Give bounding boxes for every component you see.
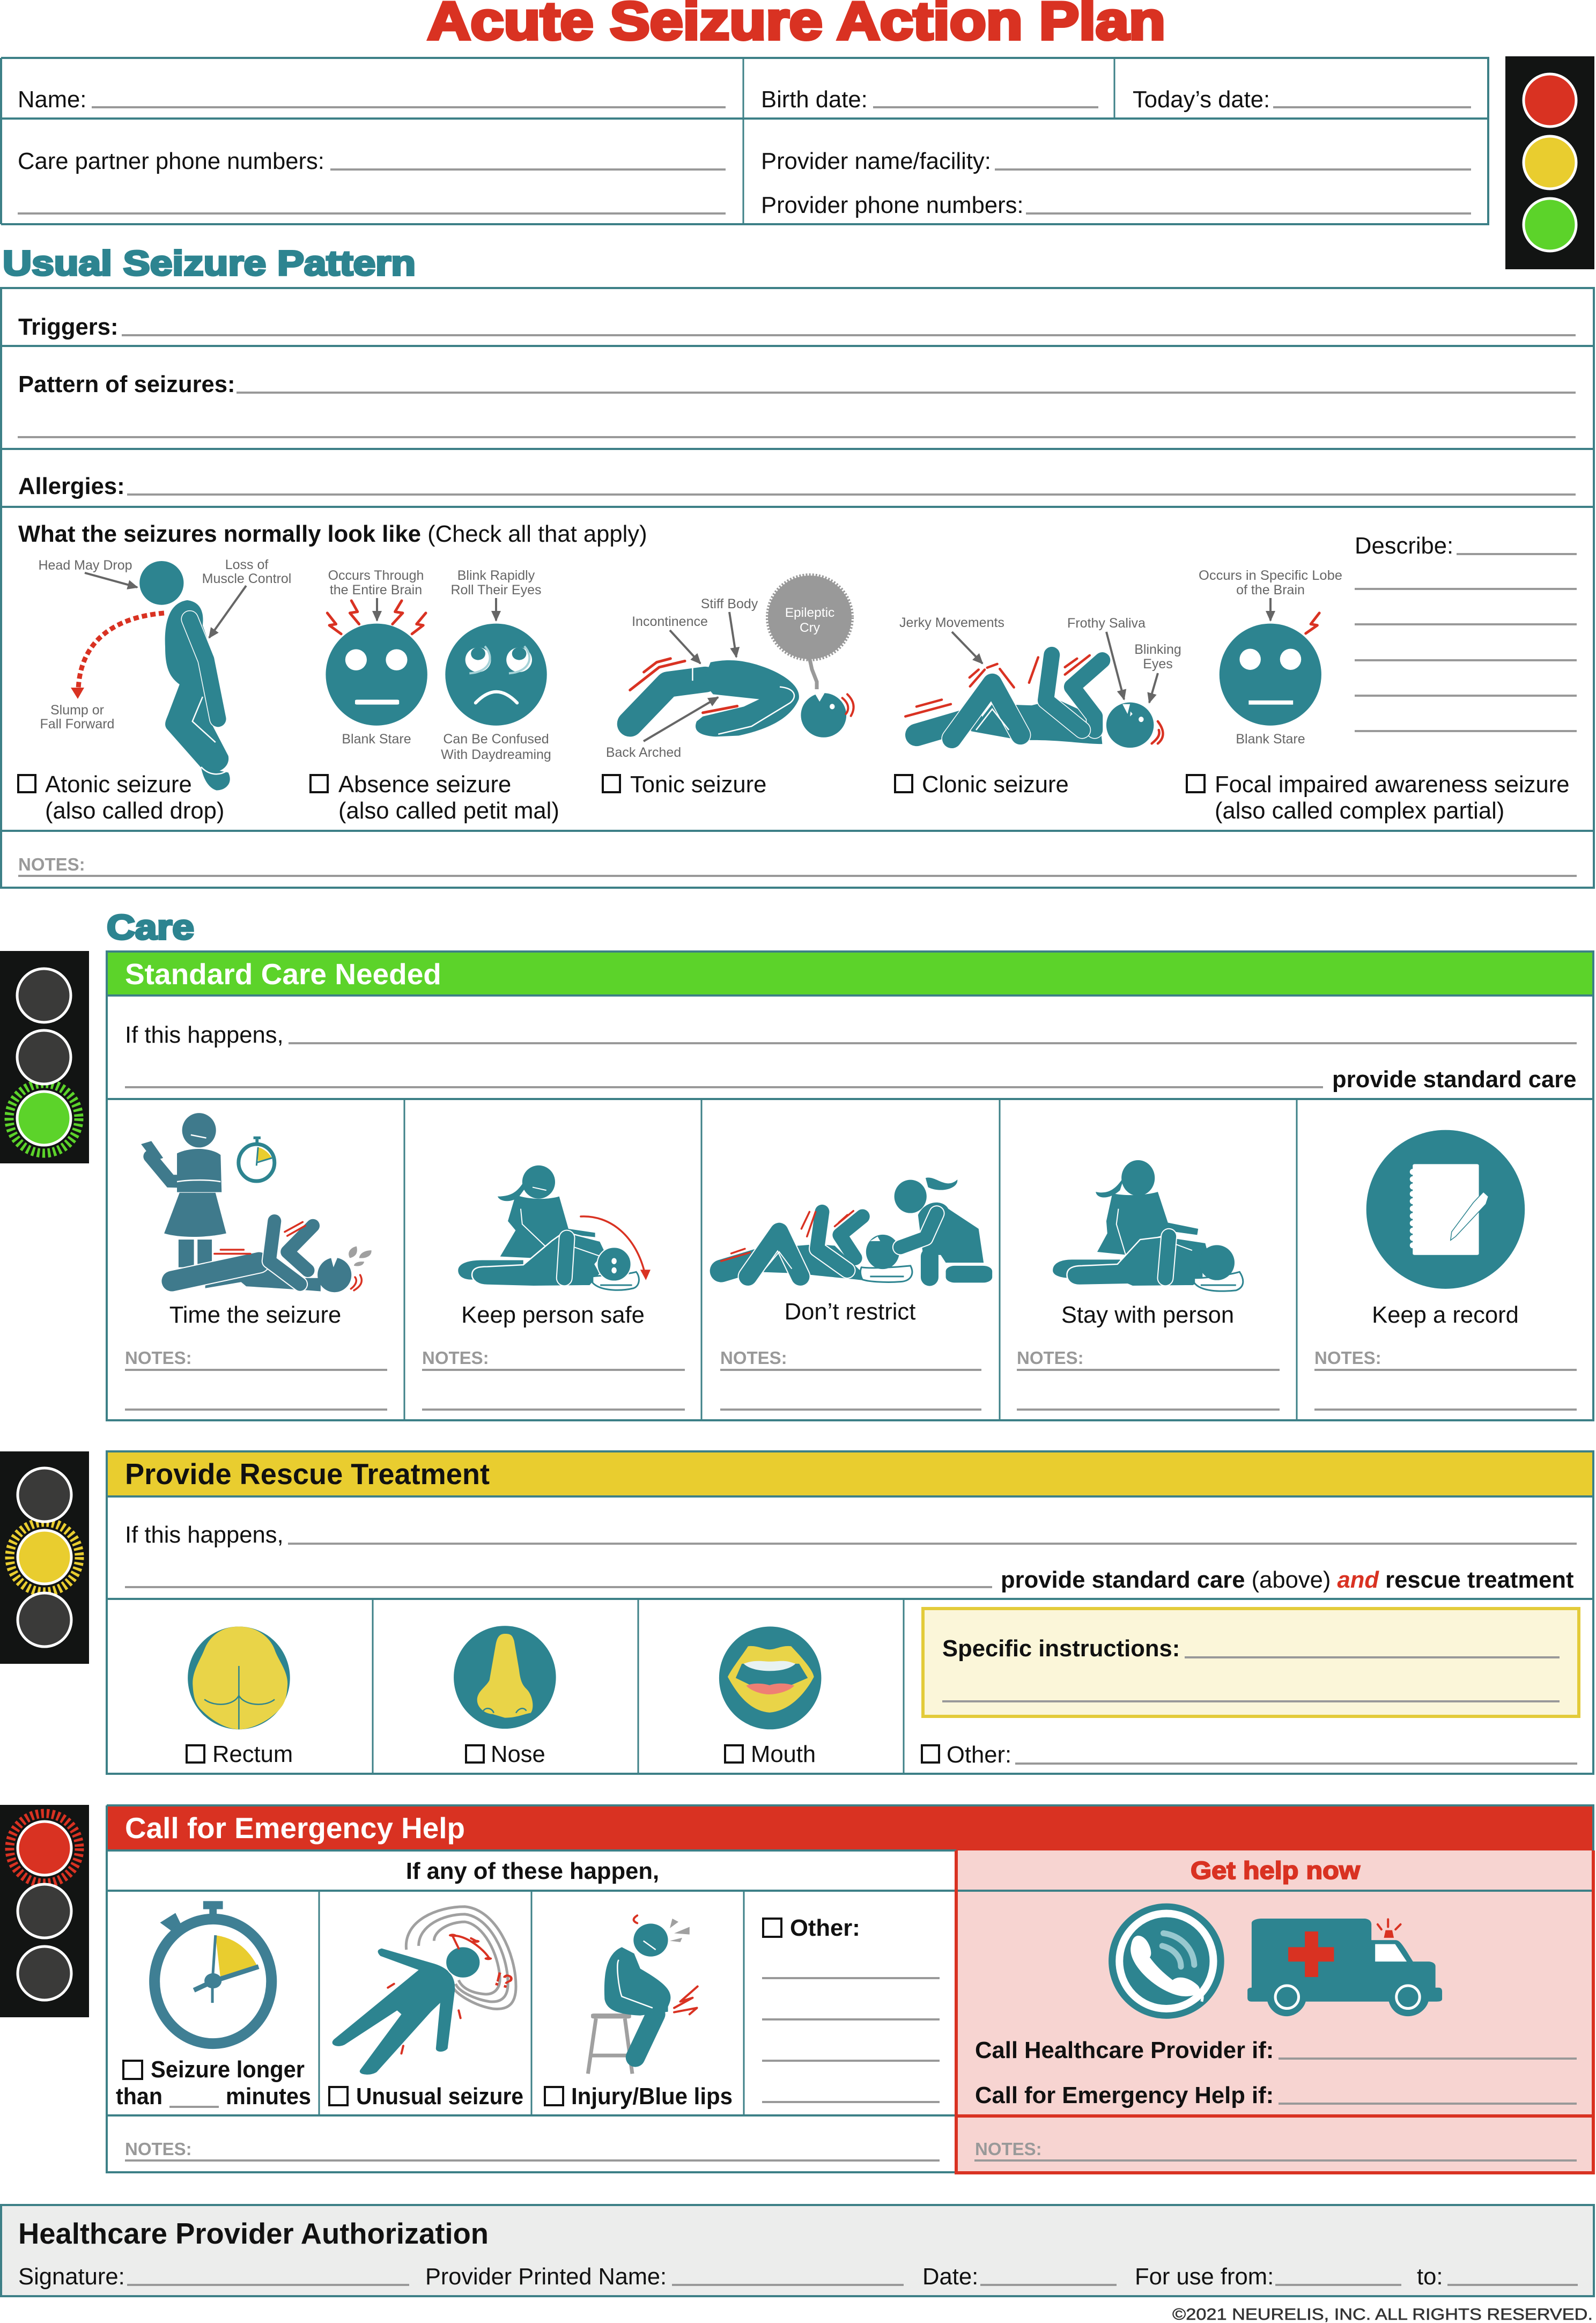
heading: Call for Emergency Help	[125, 1811, 465, 1845]
text: today's date: Today’s date:	[1133, 87, 1270, 113]
checkbox and label: seizure longer: minutes	[226, 2084, 311, 2110]
text: if this happens: If this happens,	[125, 1022, 284, 1048]
panel: provide rescue treatment	[107, 1451, 1593, 1774]
notes: NOTES:	[975, 2139, 1042, 2159]
label: Incontinence	[632, 614, 708, 629]
text: care partner: Care partner phone numbers:	[18, 149, 324, 174]
label: Can Be Confused	[443, 732, 549, 747]
icon: stopwatch	[154, 1901, 271, 2044]
text: call for emergency help: Call for Emergency Help if:	[975, 2083, 1274, 2108]
callout: epileptic cry	[768, 576, 852, 689]
heading: usual seizure pattern: Usual Seizure Pattern	[3, 244, 416, 283]
text: birth date: Birth date:	[761, 87, 868, 113]
text: atonic: (also called drop)	[45, 798, 224, 824]
describe block: Describe:	[1355, 533, 1453, 559]
notes	[1314, 1348, 1577, 1410]
header bar: green	[107, 952, 1593, 995]
label: Blinking	[1134, 642, 1181, 657]
signature fields: to:	[1417, 2264, 1443, 2290]
checkbox and label: unusual seizure: Unusual seizure	[356, 2084, 523, 2110]
text: Stay with person	[1061, 1302, 1234, 1328]
illustration: focal seizure	[1199, 568, 1342, 747]
label: Eyes	[1143, 657, 1173, 672]
label: Occurs Through	[328, 568, 424, 583]
text: provide care and rescue: provide standard care (above) and rescue treatment	[1001, 1567, 1573, 1593]
checkbox: tonic	[603, 775, 620, 792]
traffic light: all on	[1505, 56, 1594, 269]
text: provide standard care: provide standard care	[1332, 1067, 1576, 1093]
checkbox and label: injury: Injury/Blue lips	[571, 2084, 733, 2110]
checkbox: clonic	[895, 775, 912, 792]
checkbox and label: seizure longer: than	[116, 2084, 162, 2110]
red marks: !?	[492, 1967, 515, 1994]
callout: epileptic cry: Cry	[800, 621, 821, 635]
label: Stiff Body	[701, 596, 758, 611]
callout: specific instructions: Specific instructions:	[942, 1636, 1180, 1662]
label: Head May Drop	[38, 558, 132, 573]
illustration: stay with person	[1053, 1160, 1243, 1291]
text: provider phone: Provider phone numbers:	[761, 193, 1023, 218]
text: what seizures look like: What the seizures normally look like (Check all that apply)	[18, 521, 647, 547]
signature fields: Date:	[922, 2264, 978, 2290]
icon: injury on stool	[588, 1915, 698, 2074]
heading: care: Care	[107, 908, 194, 947]
checkbox and label: other	[922, 1742, 1577, 1768]
checkbox: focal	[1187, 775, 1205, 792]
icon: rectum	[188, 1627, 290, 1729]
label: Occurs in Specific Lobe	[1199, 568, 1342, 583]
notes: NOTES:	[125, 1348, 192, 1368]
text: name: Name:	[18, 87, 86, 113]
header bar: red	[107, 1805, 1593, 1850]
traffic light: yellow	[0, 1451, 89, 1664]
heading: Provide Rescue Treatment	[125, 1457, 490, 1491]
traffic light: red	[0, 1805, 89, 2017]
label: Blank Stare	[1236, 732, 1305, 747]
icon: unusual seizure	[332, 1907, 516, 2075]
text: Keep person safe	[461, 1302, 645, 1328]
checkbox and label: mouth: Mouth	[751, 1742, 816, 1767]
text: focal: Focal impaired awareness seizure	[1215, 772, 1569, 798]
panel: healthcare provider authorization	[1, 2205, 1594, 2296]
illustration: clonic seizure	[899, 615, 1181, 748]
illustration: time the seizure	[141, 1113, 372, 1292]
text: triggers: Triggers:	[18, 314, 119, 340]
describe block	[1355, 533, 1577, 731]
label: Muscle Control	[202, 571, 291, 586]
illustration: absence seizure	[326, 568, 551, 762]
illustration: atonic seizure	[38, 557, 291, 790]
copyright: ©2021 NEURELIS, INC. ALL RIGHTS RESERVED.	[1172, 2305, 1593, 2323]
text: absence: Absence seizure	[338, 772, 511, 798]
icon: keep a record notebook	[1366, 1130, 1525, 1289]
panel: usual seizure pattern	[1, 288, 1594, 888]
callout: epileptic cry: Epileptic	[785, 606, 834, 620]
notes: NOTES:	[18, 854, 85, 874]
label: of the Brain	[1236, 582, 1305, 598]
label: Back Arched	[606, 745, 681, 760]
label: Fall Forward	[40, 717, 114, 732]
label: the Entire Brain	[330, 582, 422, 598]
notes	[720, 1348, 981, 1410]
header bar: yellow	[107, 1451, 1593, 1496]
text: if any of these happen: If any of these happen,	[406, 1859, 659, 1884]
text: Time the seizure	[169, 1302, 341, 1328]
text: get help now: Get help now	[1191, 1856, 1360, 1884]
notes: NOTES:	[1017, 1348, 1084, 1368]
notes	[1017, 1348, 1280, 1410]
heading: Healthcare Provider Authorization	[18, 2217, 489, 2250]
icon: ambulance	[1247, 1919, 1442, 2016]
text: atonic: Atonic seizure	[45, 772, 192, 798]
label: Frothy Saliva	[1067, 616, 1146, 631]
text: focal: (also called complex partial)	[1215, 798, 1504, 824]
notes: NOTES:	[422, 1348, 489, 1368]
icon: mouth	[719, 1627, 821, 1729]
text: call healthcare provider: Call Healthcare Provider if:	[975, 2038, 1274, 2063]
notes	[125, 1348, 387, 1410]
signature fields: For use from:	[1135, 2264, 1274, 2290]
text: Don’t restrict	[785, 1299, 915, 1325]
checkbox and label: seizure longer	[116, 2057, 311, 2110]
checkbox: atonic	[18, 775, 35, 792]
label: Blank Stare	[342, 732, 411, 747]
illustration: keep person safe	[458, 1166, 651, 1290]
signature fields: Signature:	[18, 2264, 125, 2290]
notes: NOTES:	[125, 2139, 192, 2159]
label: Jerky Movements	[899, 615, 1004, 630]
text: allergies: Allergies:	[18, 474, 125, 499]
illustration: tonic seizure	[606, 576, 854, 760]
text: Keep a record	[1372, 1302, 1519, 1328]
text: if this happens: If this happens,	[125, 1522, 284, 1548]
checkbox and label: nose	[466, 1742, 545, 1767]
text: tonic: Tonic seizure	[630, 772, 766, 798]
checkbox and lines: other: Other:	[790, 1915, 860, 1941]
text: absence: (also called petit mal)	[338, 798, 559, 824]
notes: NOTES:	[720, 1348, 787, 1368]
checkbox and lines: other	[762, 1915, 940, 2102]
signature fields	[18, 2264, 1578, 2290]
panel: standard care needed	[107, 952, 1593, 1420]
icon: phone	[1109, 1904, 1224, 2019]
checkbox: absence	[311, 775, 328, 792]
panel: call for emergency help	[107, 1805, 1593, 2173]
label: Slump or	[50, 703, 104, 718]
label: Roll Their Eyes	[450, 582, 542, 598]
checkbox and label: other: Other:	[947, 1742, 1011, 1768]
illustration: don't restrict	[721, 1177, 992, 1282]
text: provider: Provider name/facility:	[761, 149, 991, 174]
checkbox and label: rectum: Rectum	[212, 1742, 293, 1767]
signature fields: Provider Printed Name:	[425, 2264, 667, 2290]
pink background: get help	[956, 1850, 1593, 2173]
icon: nose	[454, 1626, 556, 1729]
text: pattern: Pattern of seizures:	[18, 372, 235, 397]
checkbox and label: nose: Nose	[491, 1742, 545, 1767]
label: Blink Rapidly	[457, 568, 535, 583]
heading: Standard Care Needed	[125, 957, 441, 991]
text: clonic: Clonic seizure	[922, 772, 1069, 798]
checkbox and label: seizure longer: Seizure longer	[151, 2057, 305, 2083]
label: Loss of	[225, 557, 268, 572]
label: With Daydreaming	[441, 747, 551, 762]
notes: NOTES:	[1314, 1348, 1381, 1368]
traffic light: green	[0, 951, 89, 1163]
notes	[422, 1348, 685, 1410]
panel: patient details	[1, 58, 1488, 224]
callout: specific instructions	[923, 1609, 1579, 1716]
